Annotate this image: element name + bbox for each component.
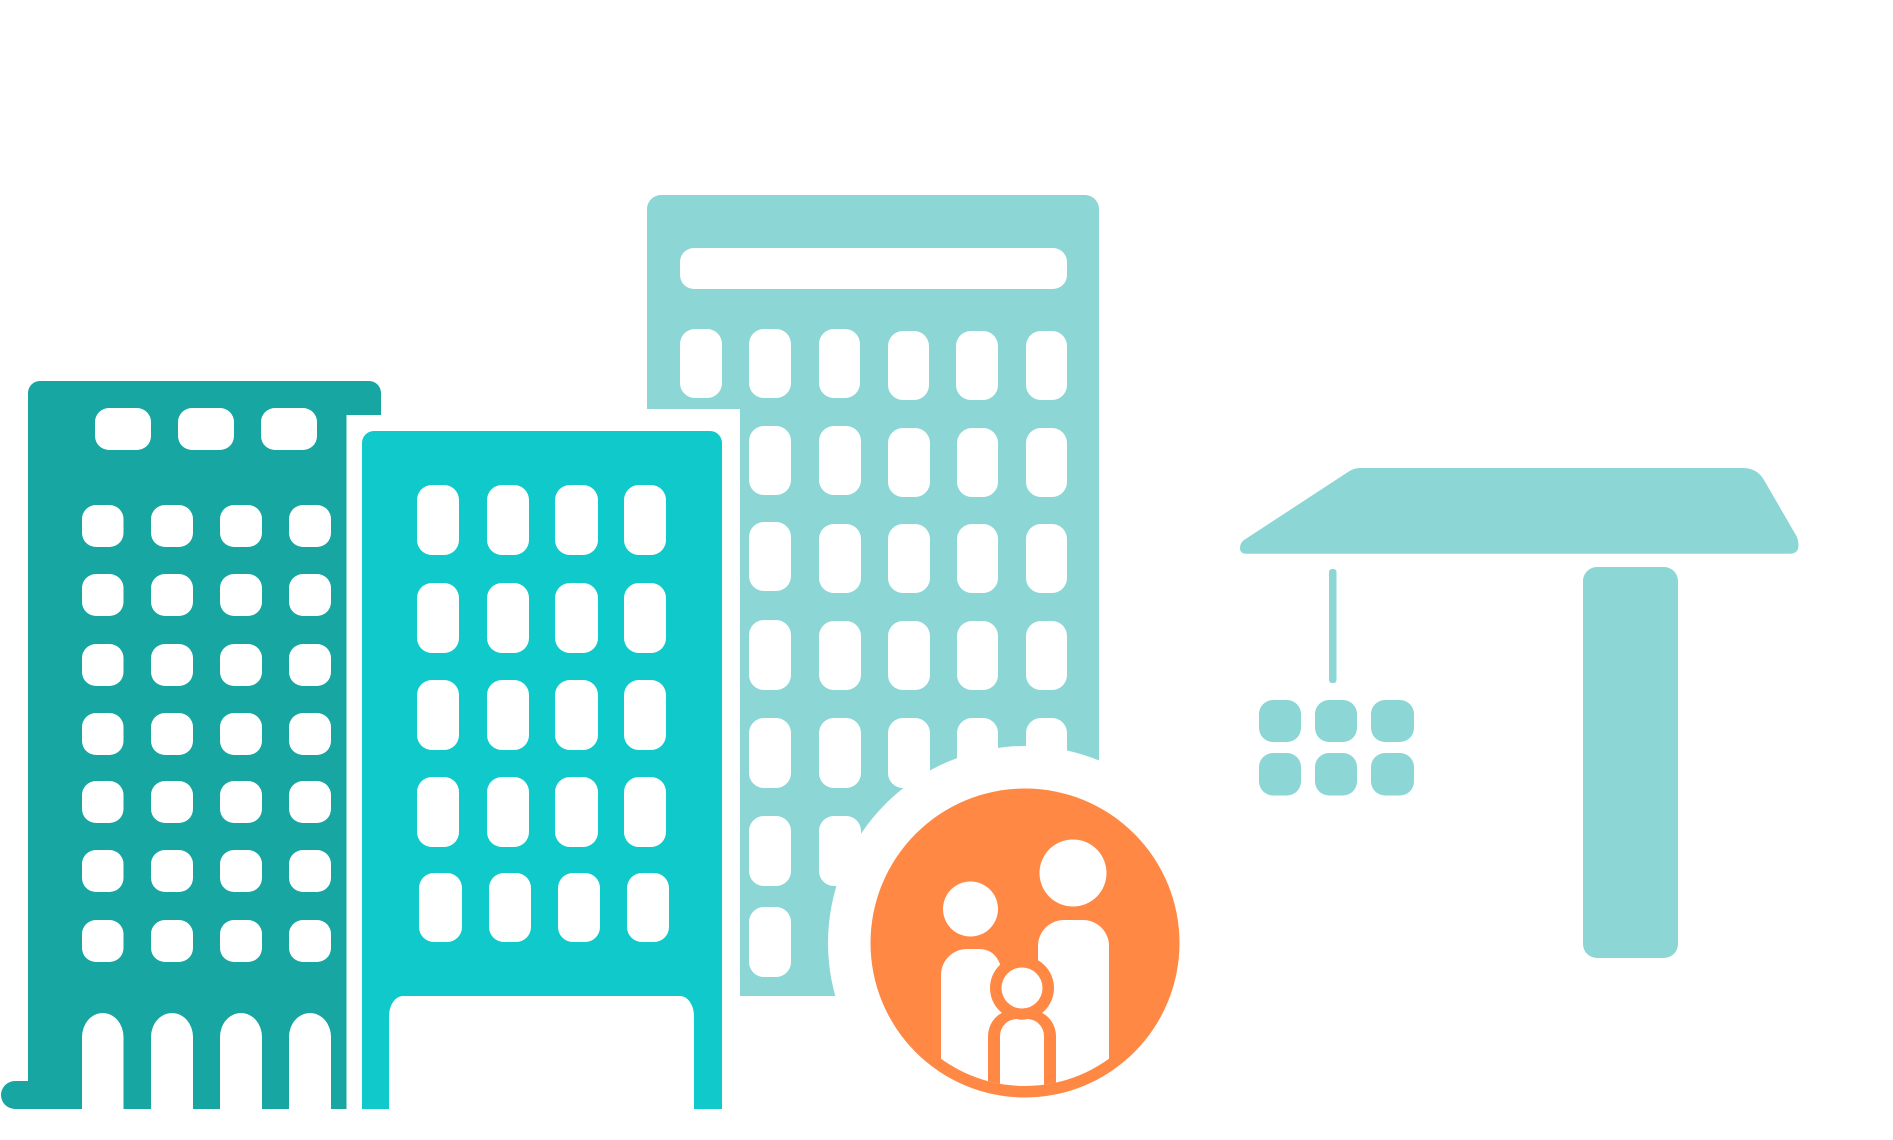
light building banner window: [680, 248, 1067, 289]
crane load blocks: [1259, 700, 1414, 796]
crane jib: [1240, 468, 1798, 554]
parent heads: [943, 840, 1106, 936]
bright teal building: [362, 431, 722, 1109]
dark building arched doors: [82, 1013, 331, 1109]
dark building top windows: [95, 408, 317, 450]
crane cable: [1329, 569, 1336, 683]
child head: [1002, 968, 1042, 1008]
parent and child bodies: [941, 920, 1109, 1086]
icon: family badge: [828, 746, 1180, 1098]
dark teal building: [1, 381, 381, 1109]
crane mast: [1583, 567, 1678, 958]
light building windows: [680, 329, 1067, 977]
crane: [1240, 468, 1798, 958]
bright building entrance: [389, 996, 694, 1109]
light tall building: [647, 195, 1099, 996]
dark building window grid: [82, 505, 331, 962]
bright building windows: [417, 485, 669, 942]
